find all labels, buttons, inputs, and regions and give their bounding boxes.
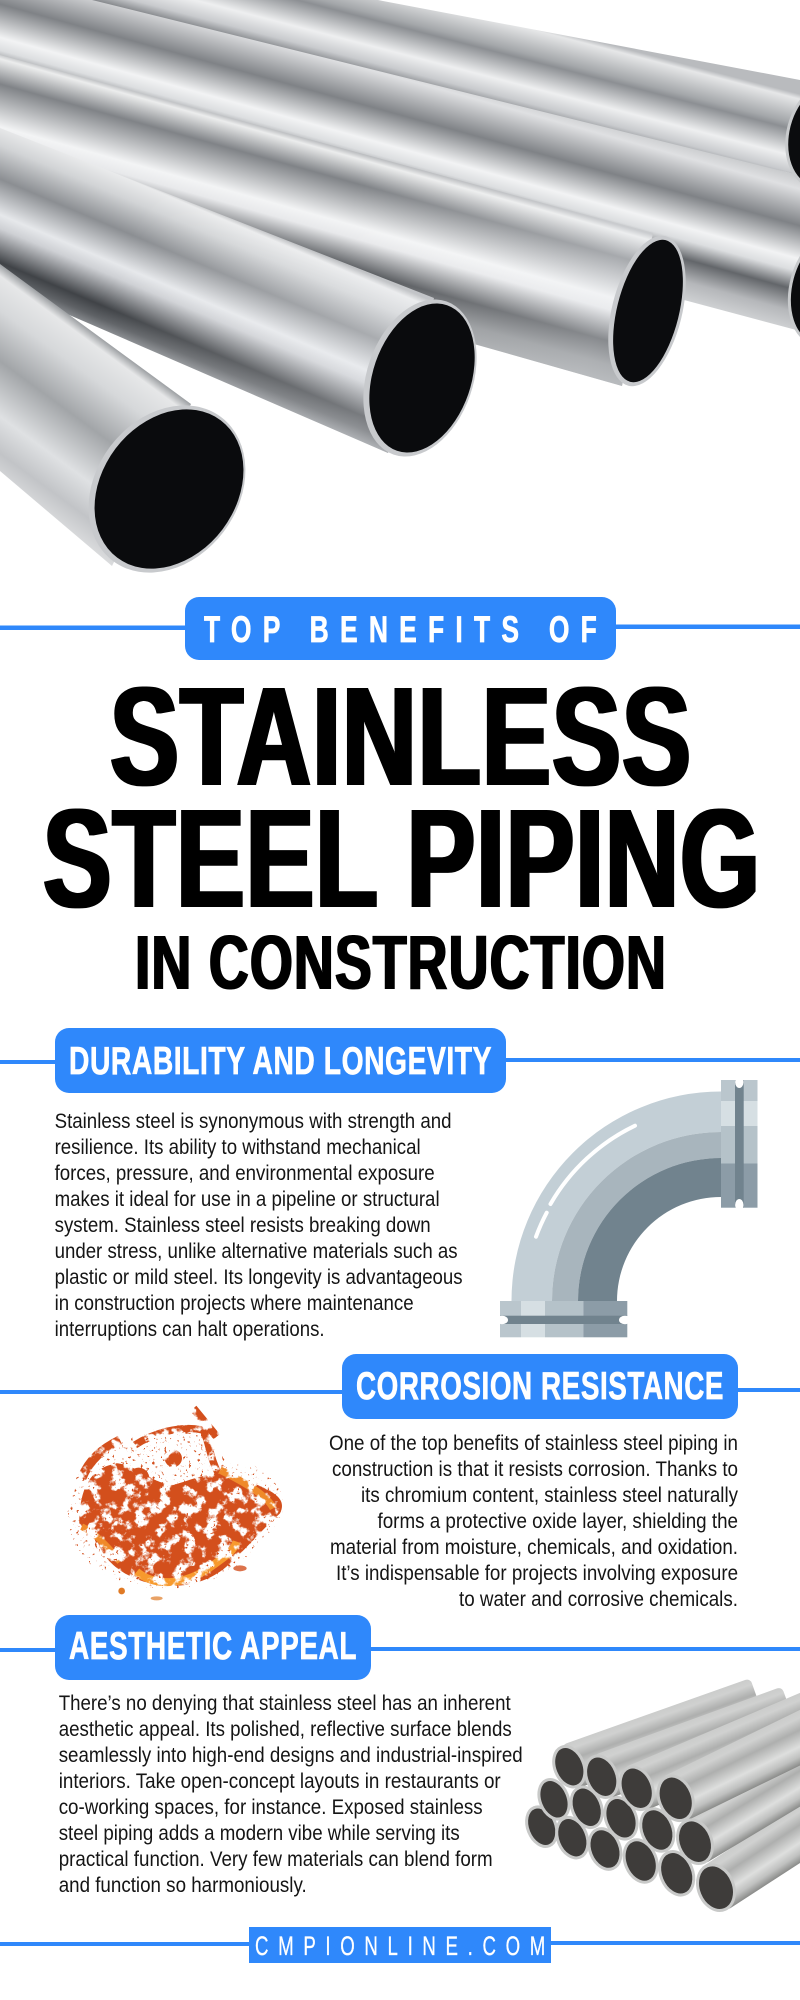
heading: corrosion resistance [342,1354,738,1419]
heading: aesthetic appeal: AESTHETIC APPEAL [69,1625,357,1668]
text: durability: makes it ideal for use in a pipeline or structural [55,1188,440,1211]
text: corrosion: material from moisture, chemicals, and oxidation. [330,1536,738,1559]
text: corrosion: It’s indispensable for projects involving exposure [336,1562,738,1585]
text: durability: forces, pressure, and environmental exposure [55,1162,435,1185]
text: aesthetic: steel piping adds a modern vibe while serving its [59,1822,460,1845]
text: corrosion: to water and corrosive chemicals. [459,1588,738,1611]
text: durability: resilience. Its ability to withstand mechanical [55,1136,421,1159]
text: durability: interruptions can halt operations. [55,1318,325,1341]
text: aesthetic: There’s no denying that stainless steel has an inherent [59,1692,511,1715]
text: durability: Stainless steel is synonymous with strength and [55,1110,452,1133]
text: aesthetic: aesthetic appeal. Its polished, reflective surface blends [59,1718,512,1741]
text: corrosion: its chromium content, stainless steel naturally [361,1484,738,1507]
text: aesthetic: co-working spaces, for instance. Exposed stainless [59,1796,483,1819]
pipe 5 [0,264,278,604]
text: durability: system. Stainless steel resists breaking down [55,1214,431,1237]
image: stack of steel pipes [521,1662,800,1916]
text: corrosion: forms a protective oxide layer, shielding the [378,1510,738,1533]
text: durability: in construction projects where maintenance [55,1292,414,1315]
icon: rust splash [68,1408,284,1600]
text: aesthetic: seamlessly into high-end designs and industrial-inspired [59,1744,523,1767]
text: corrosion: One of the top benefits of stainless steel piping in [329,1432,738,1455]
pipe 1 [92,0,800,197]
text: durability: under stress, unlike alternative materials such as [55,1240,458,1263]
text: aesthetic [59,1692,523,1897]
title [43,657,761,1006]
pipe 2 [0,0,800,354]
heading: durability and longevity [55,1028,506,1093]
text: corrosion: construction is that it resists corrosion. Thanks to [332,1458,738,1481]
text: aesthetic: practical function. Very few materials can blend form [59,1848,493,1871]
footer: website: CMPIONLINE.COM [255,1931,555,1961]
pipe 4 [0,128,496,472]
hero image: stainless steel pipes [0,0,800,604]
text: aesthetic: and function so harmoniously. [59,1874,307,1897]
banner: top benefits of: TOP BENEFITS OF [204,609,608,650]
text: aesthetic: interiors. Take open-concept layouts in restaurants or [59,1770,501,1793]
text: durability: plastic or mild steel. Its longevity is advantageous [55,1266,463,1289]
banner: top benefits of [185,597,616,660]
heading: aesthetic appeal [55,1615,371,1680]
footer: website [249,1927,555,1963]
text: corrosion [329,1432,738,1611]
pipe 3 [0,55,700,394]
heading: durability and longevity: DURABILITY AND LONGEVITY [69,1040,492,1083]
text: durability [55,1110,463,1341]
icon: pipe elbow [496,1076,758,1337]
